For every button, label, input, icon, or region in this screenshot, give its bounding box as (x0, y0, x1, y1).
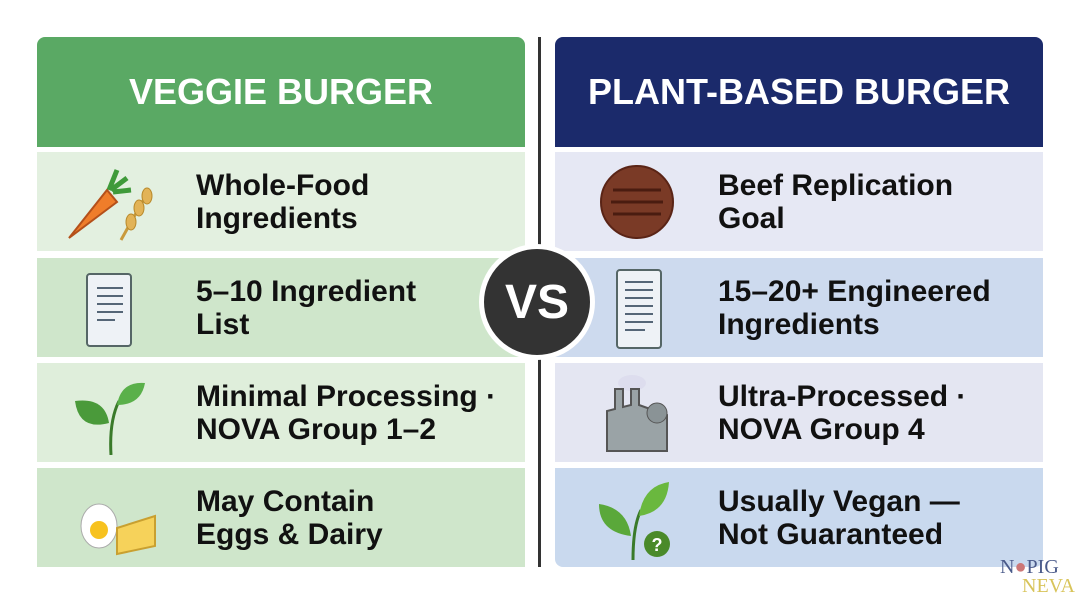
icon: leaves with question: ? (652, 535, 662, 555)
text: List (196, 308, 249, 340)
text: Not Guaranteed (718, 518, 943, 550)
text: Eggs & Dairy (196, 518, 383, 550)
VS badge: VS (505, 276, 569, 328)
logo: NEVA (1022, 575, 1075, 597)
text (718, 380, 966, 446)
text: Beef Replication (718, 168, 953, 202)
text: Ingredients (718, 308, 880, 340)
heading: veggie burger (37, 37, 525, 147)
text (196, 380, 496, 446)
text: Ingredients (196, 202, 358, 234)
VS badge (479, 244, 595, 360)
heading: plant-based burger: PLANT-BASED BURGER (588, 71, 1010, 112)
row: beef replication (555, 152, 1043, 251)
text: Goal (718, 202, 785, 234)
text (196, 274, 416, 340)
text: May Contain (196, 484, 374, 518)
row: engineered ingredients (555, 258, 1043, 357)
text: NOVA Group 4 (718, 412, 925, 446)
divider line (538, 37, 541, 567)
text: 5–10 Ingredient (196, 274, 416, 308)
icon: factory (606, 375, 668, 452)
text (718, 168, 953, 234)
text: 15–20+ Engineered (718, 274, 991, 308)
text (196, 168, 369, 234)
row: usually vegan (555, 468, 1043, 567)
row: eggs & dairy (37, 468, 525, 567)
row: ultra-processed (555, 363, 1043, 462)
logo: N●PIG (1000, 556, 1059, 578)
row: minimal processing (37, 363, 525, 462)
icon: leaf sprout (75, 382, 145, 455)
panel: veggie burger (37, 37, 525, 567)
icon: egg and cheese (80, 504, 156, 556)
text (718, 484, 960, 550)
text: Whole-Food (196, 168, 369, 202)
text: Usually Vegan — (718, 484, 960, 518)
logo (1000, 556, 1075, 597)
text: NOVA Group 1–2 (196, 412, 436, 446)
icon: patty (600, 165, 674, 239)
heading: veggie burger: VEGGIE BURGER (129, 71, 433, 112)
row: ingredient list (37, 258, 525, 357)
panel: plant-based burger (555, 37, 1043, 567)
icon: carrot and wheat (68, 169, 152, 241)
text (196, 484, 383, 550)
icon: scroll list (86, 273, 132, 347)
heading: plant-based burger (555, 37, 1043, 147)
text (718, 274, 991, 340)
icon: leaves with question (599, 482, 670, 560)
text: Minimal Processing · (196, 380, 496, 412)
row: whole-food (37, 152, 525, 251)
text: Ultra-Processed · (718, 380, 966, 412)
icon: long scroll (616, 269, 662, 349)
